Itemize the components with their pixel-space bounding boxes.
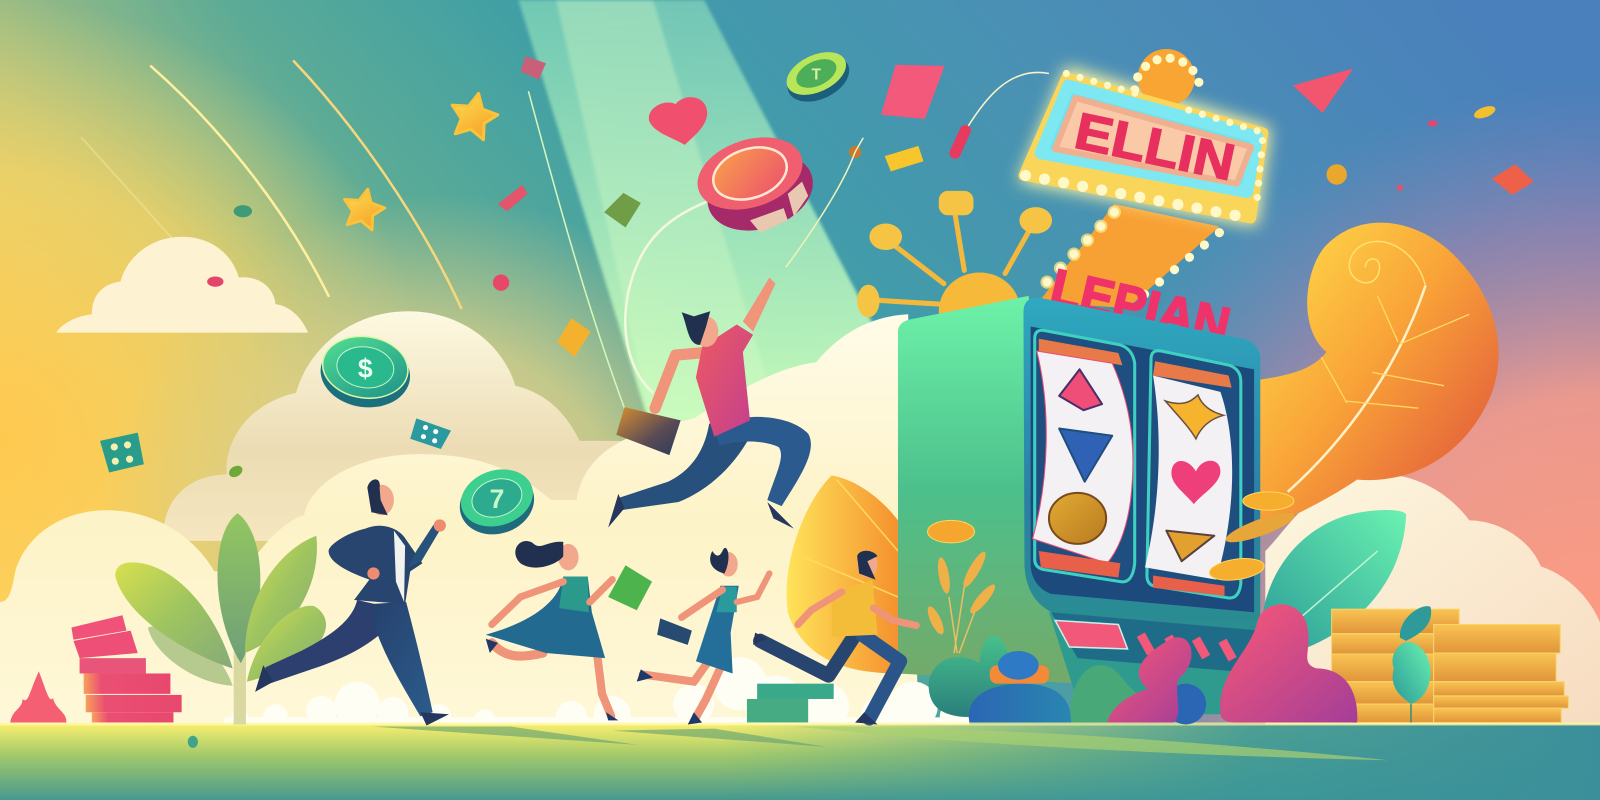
jacket bbox=[329, 526, 422, 604]
control panel bbox=[1051, 612, 1260, 673]
large green leaf bbox=[1261, 510, 1406, 654]
pink blob front bbox=[1107, 637, 1192, 722]
chip top green: T bbox=[812, 67, 822, 84]
jumping man bbox=[608, 278, 811, 529]
raised arm bbox=[408, 524, 441, 567]
diamond symbol bbox=[1059, 369, 1102, 410]
right blue blob bbox=[1165, 684, 1206, 724]
machine lower base bbox=[1049, 612, 1257, 714]
green dot bbox=[227, 463, 244, 479]
right cloud bbox=[1265, 474, 1600, 724]
red dot bbox=[1397, 185, 1403, 191]
red dot bbox=[207, 277, 223, 287]
gold square bbox=[557, 318, 591, 357]
runner in yellow bbox=[753, 551, 916, 724]
shirt bbox=[696, 324, 753, 437]
gold triangle symbol bbox=[1166, 531, 1214, 561]
shirt front bbox=[394, 531, 405, 602]
sign text ELLIN: ELLIN bbox=[1070, 102, 1240, 191]
pink block stack bbox=[71, 615, 182, 722]
shoes bbox=[608, 494, 794, 529]
coins spilling from machine bbox=[1208, 492, 1298, 583]
coin symbol bbox=[1049, 493, 1106, 544]
dice left bbox=[100, 433, 144, 472]
shoes bbox=[255, 665, 449, 726]
chip trail bbox=[625, 202, 706, 393]
heart bbox=[649, 97, 707, 145]
marquee arrow bbox=[1036, 204, 1219, 308]
green block stack bbox=[747, 684, 834, 722]
star 2 bbox=[340, 185, 388, 231]
ground bbox=[0, 722, 1600, 800]
machine side bbox=[898, 296, 1082, 684]
chip top green bbox=[780, 43, 857, 111]
chip green seven: 7 bbox=[490, 484, 504, 514]
rear arm bbox=[655, 352, 710, 408]
cloud bank left and centre bbox=[0, 314, 969, 733]
triangle symbol bbox=[1059, 429, 1112, 482]
back leg bbox=[265, 600, 402, 684]
pink pill bbox=[1428, 120, 1438, 127]
small tree at coins bbox=[1392, 606, 1431, 722]
left reel bbox=[1033, 330, 1135, 582]
coin stack front bbox=[1434, 624, 1568, 722]
chip green seven bbox=[452, 460, 542, 544]
big orange leaf bbox=[1260, 223, 1499, 531]
coin left bbox=[928, 520, 974, 543]
pink flower bbox=[10, 671, 66, 722]
star symbol bbox=[1165, 395, 1223, 439]
pin bbox=[849, 146, 861, 158]
plant and coin decor at machine bbox=[925, 520, 1206, 724]
big red chip bbox=[625, 125, 823, 393]
dice right bbox=[410, 418, 451, 449]
briefcase bbox=[616, 407, 681, 455]
chip green dollar: $ bbox=[358, 354, 373, 384]
woman with folder bbox=[486, 541, 652, 720]
blue stacked stones bbox=[969, 651, 1071, 722]
back cloud bbox=[163, 311, 633, 541]
green blob bbox=[1070, 665, 1139, 722]
red bar bbox=[498, 185, 528, 211]
green bushes bbox=[929, 636, 1013, 717]
orange leaf behind runner bbox=[787, 476, 898, 673]
machine front bbox=[1023, 298, 1260, 633]
star 1 bbox=[447, 89, 501, 142]
coin stack back bbox=[1332, 609, 1459, 722]
right reel bbox=[1145, 351, 1241, 598]
woman with briefcase bbox=[637, 548, 769, 724]
slot machine bbox=[898, 296, 1260, 714]
gold bar bbox=[885, 146, 923, 171]
curved pin line bbox=[786, 138, 863, 267]
pink blob large bbox=[1220, 604, 1357, 722]
green dot bbox=[234, 205, 252, 217]
sign text LEPIAN: LEPIAN bbox=[1045, 258, 1235, 355]
light streaks bbox=[82, 61, 624, 408]
plant bbox=[115, 513, 326, 724]
marquee sign bbox=[1018, 49, 1270, 227]
front leg bbox=[369, 602, 433, 716]
red dot bbox=[493, 274, 509, 291]
red diamond top bbox=[882, 65, 944, 118]
stub tile bbox=[520, 56, 546, 80]
raised arm bbox=[743, 278, 776, 332]
heart symbol bbox=[1171, 461, 1220, 504]
chip green dollar bbox=[316, 331, 414, 413]
reel window bbox=[1031, 327, 1254, 612]
floating shapes bbox=[188, 56, 1534, 748]
diamond right bbox=[1492, 164, 1534, 195]
light beam bbox=[518, 0, 898, 571]
teal dot bbox=[188, 736, 198, 748]
green gem bbox=[604, 193, 641, 228]
rear leg bbox=[618, 423, 753, 510]
yellow pill bbox=[1472, 104, 1497, 121]
triangle top right bbox=[1294, 69, 1352, 112]
suit man running bbox=[255, 479, 449, 726]
wire and lamp bbox=[955, 72, 1049, 153]
gold coin right bbox=[1327, 164, 1347, 185]
wheat bbox=[925, 549, 998, 653]
small cloud bbox=[56, 237, 308, 333]
front leg bbox=[714, 417, 811, 506]
sunburst paddles bbox=[857, 191, 1052, 350]
